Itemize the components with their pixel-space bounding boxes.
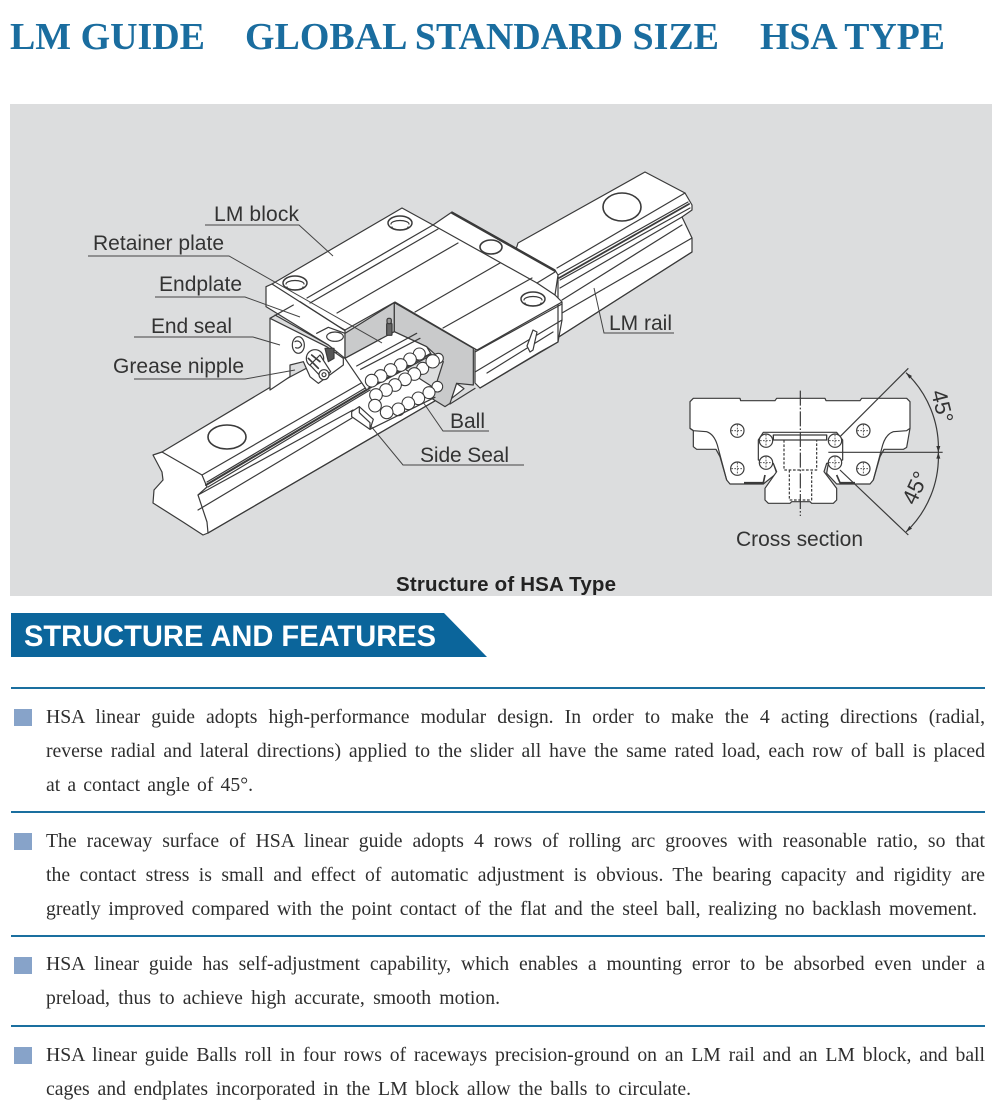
panel: structure diagram: [10, 104, 992, 596]
feature text 1: [46, 706, 985, 796]
feature text 4: [46, 1044, 985, 1100]
label: LM rail: LM rail: [609, 312, 672, 335]
angle arc: [906, 373, 938, 532]
raceway floor: [345, 332, 432, 422]
block outline: [690, 398, 910, 484]
bullet marker 3: [14, 957, 32, 974]
illustration: LM guide assembly: [153, 172, 692, 535]
feature text 2: greatly improved compared with the point contact of the flat and the steel ball, realizing no backlash movement.: [46, 898, 977, 920]
cutaway detail: [266, 284, 475, 429]
end seal and retainer plate: [266, 284, 345, 390]
grease pin: [387, 318, 392, 335]
mounting hole dashes: [784, 440, 817, 500]
label: cross section: Cross section: [736, 528, 863, 551]
center line: [799, 391, 802, 516]
label: Retainer plate: Retainer plate: [93, 232, 224, 255]
section banner: [11, 613, 487, 657]
title: [10, 16, 945, 58]
feature text 1: at a contact angle of 45°.: [46, 774, 253, 796]
label: End seal: End seal: [151, 315, 232, 338]
feature text 4: cages and endplates incorporated in the LM block allow the balls to circulate.: [46, 1078, 691, 1100]
feature text 2: The raceway surface of HSA linear guide adopts 4 rows of rolling arc grooves with reasonable ratio, so that: [46, 830, 985, 852]
label: 45 degrees lower: 45°: [897, 467, 934, 508]
feature text 2: [46, 830, 985, 920]
side seal: [352, 397, 435, 429]
bullet marker 1: [14, 709, 32, 726]
feature text 3: [46, 953, 985, 1009]
label: Side Seal: Side Seal: [420, 444, 509, 467]
label: Side Seal: [370, 425, 524, 467]
label: Endplate: Endplate: [159, 273, 242, 296]
bullet marker 2: [14, 833, 32, 850]
angle lines: [828, 368, 943, 535]
callout labels: [88, 203, 674, 467]
rail outline: [758, 432, 843, 503]
title: HSA TYPE: [760, 16, 945, 58]
grease nipple: [306, 348, 334, 380]
label: Endplate: [155, 273, 300, 317]
raceway interior walls: [345, 303, 475, 407]
label: Ball: [423, 402, 489, 433]
feature text 4: HSA linear guide Balls roll in four rows of raceways precision-ground on an LM rail and an LM block, and ball: [46, 1044, 985, 1066]
label: 45 degrees upper: 45°: [926, 387, 958, 426]
feature text 1: reverse radial and lateral directions) applied to the slider all have the same rated load, each row of ball is placed: [46, 740, 985, 762]
label: LM block: LM block: [214, 203, 300, 226]
LM block: [268, 208, 562, 388]
feature text 1: HSA linear guide adopts high-performance modular design. In order to make the 4 acting directions (radial,: [46, 706, 985, 728]
feature text 3: preload, thus to achieve high accurate, smooth motion.: [46, 987, 500, 1009]
label: Ball: Ball: [450, 410, 485, 433]
title: LM GUIDE: [10, 16, 205, 58]
caption: Structure of HSA Type: [396, 573, 616, 596]
section banner: STRUCTURE AND FEATURES: [24, 620, 436, 653]
label: LM rail: [594, 288, 674, 335]
LM rail: [153, 172, 692, 535]
label: Grease nipple: Grease nipple: [113, 355, 244, 378]
label: LM block: [205, 203, 333, 256]
balls and holes: [731, 424, 870, 475]
cross section drawing: [690, 368, 943, 535]
label: End seal: [134, 315, 280, 345]
feature text 2: the contact stress is small and effect of automatic adjustment is obvious. The bearing capacity and rigidity are: [46, 864, 985, 886]
bullet marker 4: [14, 1047, 32, 1064]
balls: [365, 348, 443, 419]
label: Retainer plate: [88, 232, 382, 343]
label: Grease nipple: [113, 355, 295, 379]
title: GLOBAL STANDARD SIZE: [245, 16, 719, 58]
feature text 3: HSA linear guide has self-adjustment capability, which enables a mounting error to be absorbed even under a: [46, 953, 985, 975]
